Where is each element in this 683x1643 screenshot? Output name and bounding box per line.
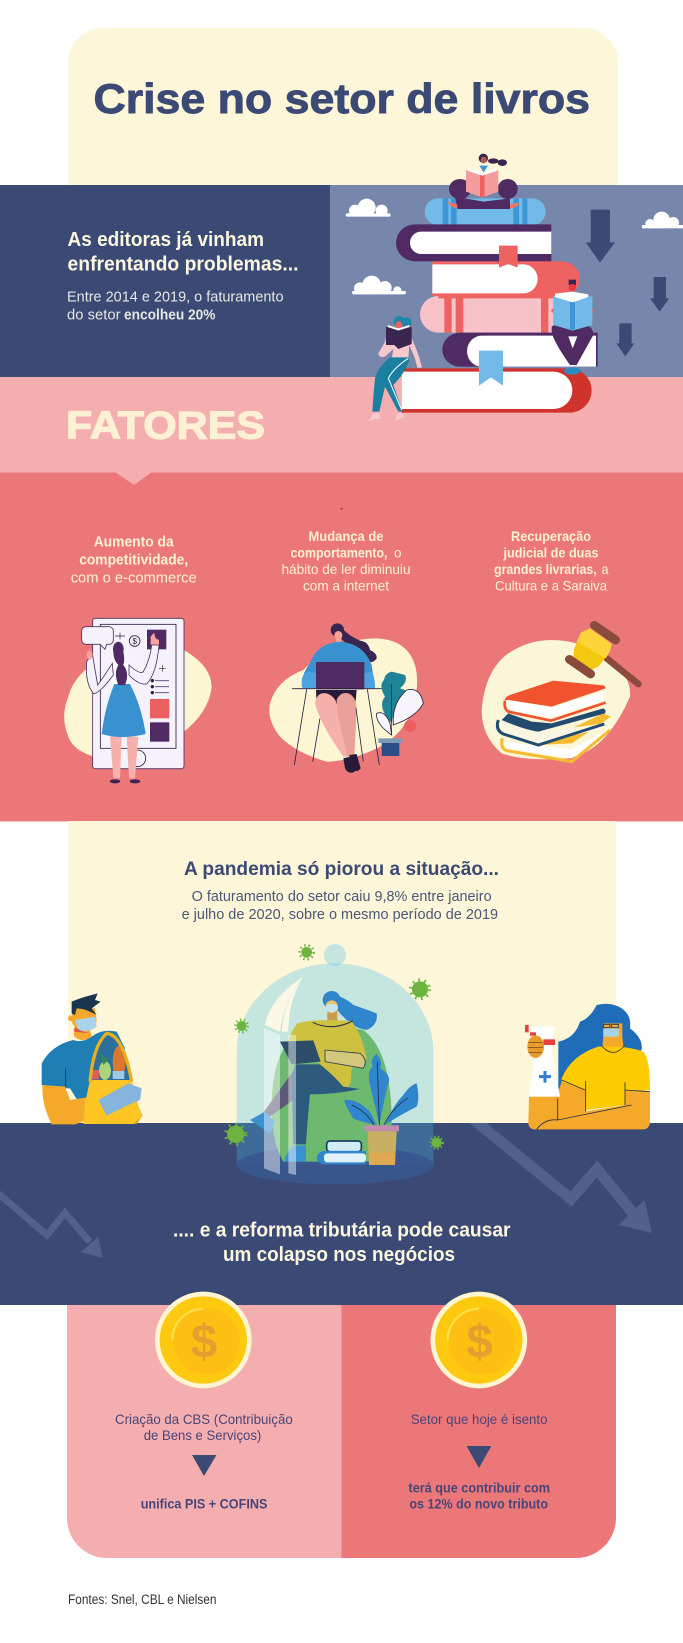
text: revenue drop: [67, 288, 284, 324]
icon: coin right: [430, 1292, 527, 1388]
icon: clouds: [346, 199, 683, 294]
text: revenue drop: Entre 2014 e 2019, o faturamento: [67, 288, 284, 306]
heading: tax reform: um colapso nos negócios: [223, 1244, 455, 1266]
factor 2 text: [282, 528, 410, 594]
book: coral: [432, 246, 580, 296]
panel: title background: [68, 28, 618, 190]
book: yellow: [502, 713, 611, 762]
icon: down arrows: [586, 210, 669, 356]
factor 2 text: comportamento,: [290, 544, 388, 560]
sources: Fontes: Snel, CBL e Nielsen: [68, 1592, 216, 1607]
panel: fatores band: [0, 377, 683, 473]
text: contribution: terá que contribuir com: [408, 1479, 550, 1495]
title: Crise no setor de livros: [94, 75, 590, 122]
panel: tax reform band: [0, 1123, 683, 1305]
illustration: stacked books with readers: [346, 154, 683, 422]
heading: fatores: FATORES: [66, 404, 265, 448]
text: contribution: [408, 1479, 550, 1512]
book: pink: [420, 296, 553, 333]
heading: publishers: As editoras já vinham: [68, 229, 264, 251]
book: red base: [402, 351, 592, 413]
icon: coin left: $: [191, 1315, 217, 1368]
text: revenue drop: do setor: [67, 306, 121, 324]
factor 2 text: Mudança de: [308, 528, 384, 544]
icon: woman at phone screen: [64, 618, 212, 783]
factor 1 text: competitividade,: [79, 552, 188, 569]
factor 1 text: com o e-commerce: [71, 570, 197, 587]
factor 2 text: com a internet: [303, 578, 389, 594]
glass bars: [264, 1028, 296, 1175]
heading: publishers: enfrentando problemas...: [68, 254, 298, 276]
factor 3 text: Recuperação: [511, 528, 591, 544]
text: pandemic revenue: O faturamento do setor caiu 9,8% entre janeiro: [192, 888, 492, 905]
icon: trend arrow right: [468, 1115, 652, 1233]
book: navy: [497, 708, 606, 745]
panel: exempt sector: [342, 1305, 616, 1558]
plant: [344, 1054, 418, 1165]
factor 1 text: [71, 534, 197, 587]
icon: woman at laptop with plant: [269, 623, 423, 773]
arrow triangle right: [466, 1446, 491, 1468]
factor 2 text: hábito de ler diminuiu: [282, 561, 410, 577]
text: pandemic revenue: [182, 888, 498, 923]
reader: woman on left: [365, 316, 422, 422]
book: purple second: [442, 333, 598, 367]
reader: woman on top: [447, 154, 520, 209]
heading: tax reform: .... e a reforma tributária pode causar: [173, 1220, 511, 1242]
factor 3 text: grandes livrarias,: [494, 561, 597, 577]
book: blue top: [425, 198, 546, 225]
text: revenue drop: encolheu 20%: [124, 306, 216, 324]
text: exempt sector: Setor que hoje é isento: [411, 1411, 548, 1427]
reader: man on right: [551, 280, 594, 375]
factor 1 text: Aumento da: [94, 534, 174, 551]
arrow triangle left: [192, 1455, 216, 1476]
factor 3 text: a: [602, 561, 609, 577]
icon: trend arrow left: [0, 1190, 103, 1258]
icon: woman at phone screen: $: [132, 637, 137, 646]
text: unifies taxes: unifica PIS + COFINS: [141, 1496, 267, 1512]
factor 2 text: o: [394, 544, 402, 560]
factor 3 text: judicial de duas: [503, 544, 599, 560]
heading: publishers: [68, 229, 298, 276]
dome glass: [237, 944, 433, 1184]
text: pandemic revenue: e julho de 2020, sobre o mesmo período de 2019: [182, 906, 498, 923]
illustration: woman in glass dome: [226, 944, 443, 1184]
heading: pandemic: A pandemia só piorou a situação...: [184, 858, 499, 880]
seated woman with mask: [250, 991, 377, 1162]
panel: books scene background: [330, 185, 683, 377]
stacked small books: [317, 1141, 366, 1164]
book: orange: [504, 681, 606, 721]
panel: CBS: [67, 1305, 342, 1558]
pointer triangle: [115, 472, 152, 485]
icon: gavel and books: [482, 625, 638, 762]
chair: [272, 1026, 392, 1162]
illustration: woman with sanitizer spray: [525, 1004, 650, 1129]
factor 3 text: Cultura e a Saraiva: [495, 578, 607, 594]
panel: publishers dark block: [0, 185, 330, 377]
text: contribution: os 12% do novo tributo: [409, 1496, 548, 1512]
factor 3 text: [494, 528, 609, 594]
illustration: man with grocery bag: [42, 993, 142, 1124]
text: CBS creation: de Bens e Serviços): [144, 1427, 261, 1443]
book: purple: [396, 224, 551, 261]
heading: tax reform: [173, 1220, 511, 1266]
panel: factors: [0, 472, 683, 822]
icon: coin right: $: [466, 1315, 493, 1368]
virus particles: [226, 945, 443, 1149]
text: CBS creation: [115, 1411, 293, 1443]
panel: pandemic: [68, 821, 616, 1124]
text: CBS creation: Criação da CBS (Contribuição: [115, 1411, 293, 1427]
icon: coin left: [155, 1292, 252, 1388]
